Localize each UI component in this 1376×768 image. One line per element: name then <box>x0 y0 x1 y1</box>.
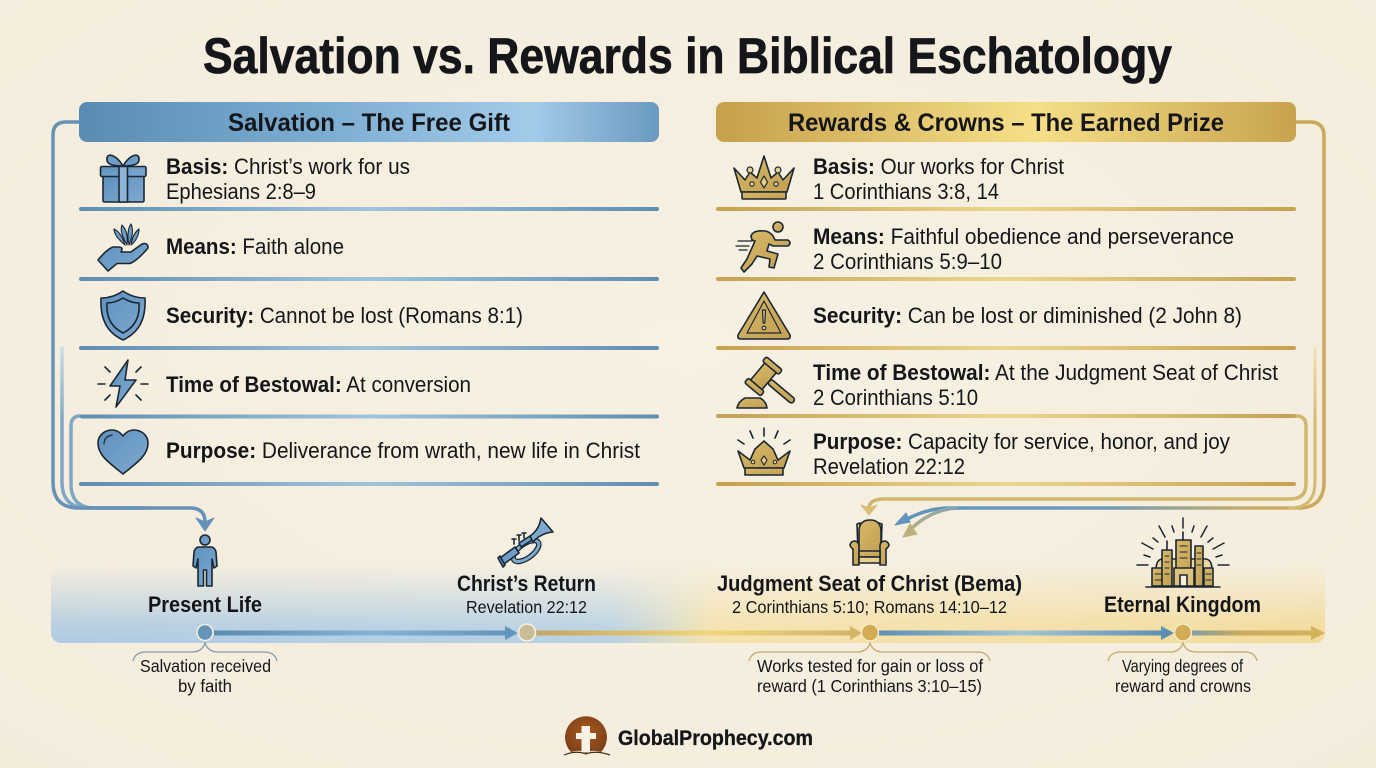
heading: rewards <box>716 102 1296 142</box>
timeline band <box>51 574 1325 643</box>
row: purpose: Purpose: Deliverance from wrath, new life in Christ <box>166 438 640 463</box>
icon: trumpet <box>498 518 553 567</box>
icon: gift <box>100 155 146 202</box>
arrow: salvation connectors to Present Life <box>53 122 214 531</box>
reference: 2 Corinthians 5:10; Romans 14:10–12 <box>732 597 1007 617</box>
row: time of bestowal: Time of Bestowal: At conversion <box>166 372 471 397</box>
reference: 2 Corinthians 5:10 <box>813 385 978 410</box>
divider <box>716 346 1296 350</box>
icon: warning <box>738 292 790 339</box>
heading: salvation <box>79 102 659 142</box>
wordmark: GlobalProphecy.com <box>618 727 813 750</box>
icon: person <box>193 535 217 586</box>
row: means: Means: Faithful obedience and perseverance <box>813 224 1234 249</box>
arrow: segment to bema <box>536 626 862 640</box>
label: christ's return: Christ’s Return <box>457 571 596 596</box>
arrow: rewards connectors to Judgment Seat <box>861 122 1324 537</box>
label: eternal kingdom: Eternal Kingdom <box>1104 592 1261 617</box>
icon: runner <box>736 222 790 272</box>
icon: gavel <box>737 357 805 415</box>
divider <box>716 414 1296 418</box>
icon: cross in sun <box>564 716 610 755</box>
note: varying degrees: Varying degrees of <box>1122 656 1243 676</box>
reference: Revelation 22:12 <box>813 454 965 479</box>
logo: GlobalProphecy.com <box>564 716 813 755</box>
note: varying degrees <box>1108 643 1257 696</box>
icon: heart <box>98 430 148 474</box>
note: salvation received: Salvation received <box>140 656 271 676</box>
reference: 2 Corinthians 5:9–10 <box>813 249 1002 274</box>
note: salvation received: by faith <box>178 676 232 696</box>
note: varying degrees: reward and crowns <box>1115 676 1251 696</box>
node: present life <box>197 624 213 640</box>
label: present life: Present Life <box>148 592 262 617</box>
row: basis: Basis: Christ’s work for us <box>166 154 410 179</box>
row: basis: Basis: Our works for Christ <box>813 154 1064 179</box>
heading: salvation: Salvation – The Free Gift <box>228 109 511 137</box>
reference: Ephesians 2:8–9 <box>166 179 316 204</box>
panel: salvation <box>79 102 659 486</box>
reference: 1 Corinthians 3:8, 14 <box>813 179 999 204</box>
node: eternal kingdom <box>1174 624 1192 641</box>
note: works tested <box>749 643 990 696</box>
divider <box>79 277 659 281</box>
icon: lightning <box>98 360 148 407</box>
icon: hand with flame <box>98 224 148 271</box>
divider <box>80 414 659 418</box>
note: salvation received <box>133 643 277 696</box>
divider <box>716 207 1296 211</box>
note: works tested: Works tested for gain or loss of <box>757 656 983 676</box>
divider <box>79 346 659 350</box>
node: judgment seat <box>862 624 878 641</box>
icon: throne <box>850 520 889 565</box>
icon: shield <box>101 291 145 340</box>
row: time of bestowal: Time of Bestowal: At the Judgment Seat of Christ <box>813 360 1278 385</box>
row: security: Security: Can be lost or diminished (2 John 8) <box>813 303 1242 328</box>
row: means: Means: Faith alone <box>166 234 344 259</box>
title: Salvation vs. Rewards in Biblical Eschatology <box>203 28 1172 84</box>
divider <box>79 207 659 211</box>
panel: timeline <box>51 518 1325 643</box>
arrow: segment to return <box>214 626 518 640</box>
icon: radiant crown <box>738 428 790 475</box>
row: purpose: Purpose: Capacity for service, honor, and joy <box>813 429 1230 454</box>
arrow: segment onward <box>1192 626 1325 640</box>
reference: Revelation 22:12 <box>466 597 587 617</box>
note: works tested: reward (1 Corinthians 3:10–15) <box>757 676 982 696</box>
row: security: Security: Cannot be lost (Romans 8:1) <box>166 303 523 328</box>
divider <box>79 482 659 486</box>
icon: crown <box>734 156 794 199</box>
label: judgment seat: Judgment Seat of Christ (Bema) <box>717 571 1022 596</box>
panel: rewards <box>716 102 1296 486</box>
heading: rewards: Rewards & Crowns – The Earned Prize <box>788 109 1224 137</box>
node: christ's return <box>518 624 536 641</box>
arrow: segment to kingdom <box>879 626 1174 640</box>
divider <box>716 277 1296 281</box>
divider <box>716 482 1296 486</box>
icon: city <box>1137 518 1229 587</box>
